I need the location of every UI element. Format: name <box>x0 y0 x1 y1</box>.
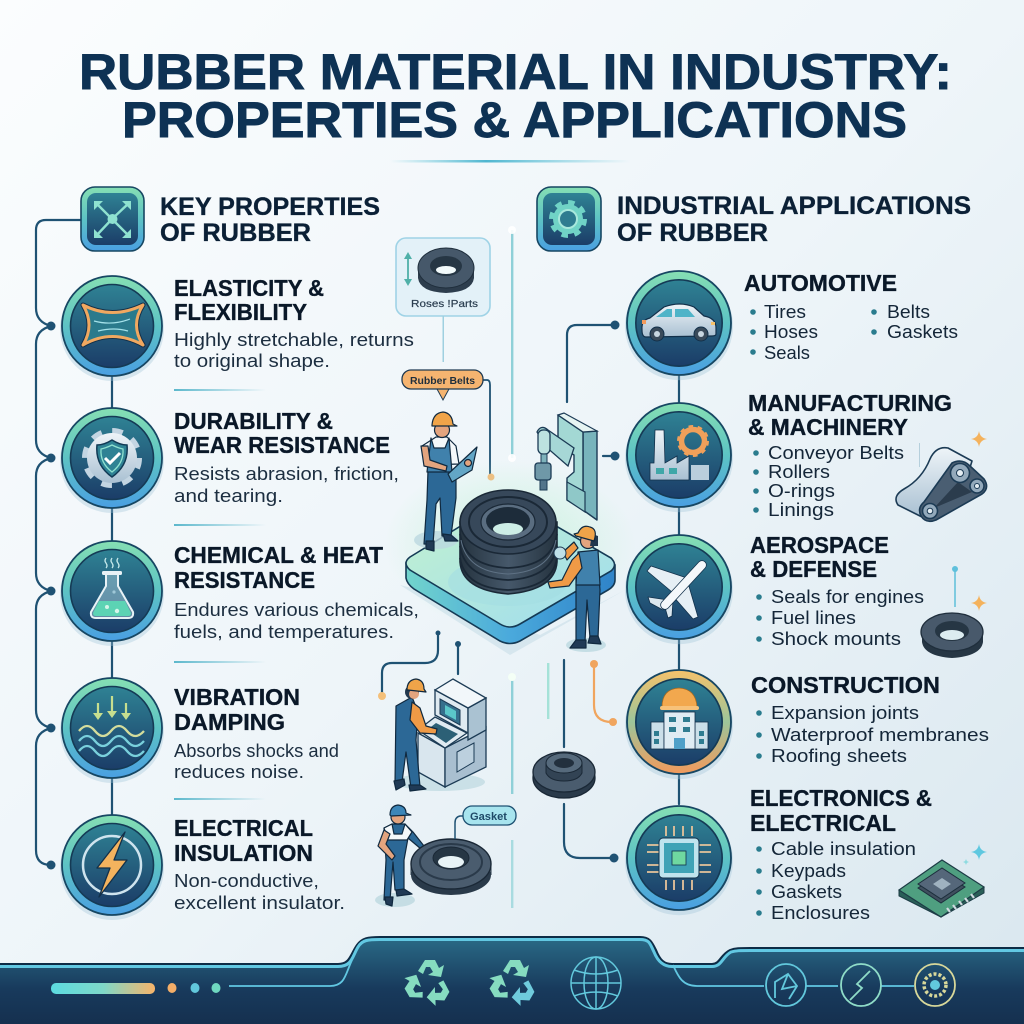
panel: aerospace and defense: & DEFENSE <box>750 556 877 582</box>
icon: circuit chip <box>899 844 987 917</box>
panel: automotive: Tires <box>764 301 806 322</box>
panel: construction: Roofing sheets <box>771 745 907 766</box>
heading: key properties <box>160 193 380 247</box>
panel: aerospace and defense <box>625 532 924 649</box>
left connector spine <box>36 220 112 870</box>
worker with gasket ring <box>375 805 491 907</box>
panel: chemical and heat: Endures various chemicals, <box>174 599 419 620</box>
panel: aerospace and defense: Shock mounts <box>771 628 901 649</box>
label card: roses parts: Roses !Parts <box>411 298 478 310</box>
panel: manufacturing and machinery <box>625 390 952 520</box>
heading: industrial applications: OF RUBBER <box>617 219 768 247</box>
panel: elasticity: Highly stretchable, returns <box>174 329 414 350</box>
panel: electrical insulation: excellent insulator. <box>174 892 345 913</box>
label: gasket <box>455 806 516 839</box>
panel: vibration damping: DAMPING <box>174 709 285 735</box>
machine arm <box>535 413 597 520</box>
panel: elasticity: ELASTICITY & <box>174 275 324 301</box>
panel: electronics and electrical: Cable insulation <box>771 838 916 859</box>
panel: electronics and electrical: Enclosures <box>771 902 870 923</box>
footer band <box>0 937 1024 1024</box>
panel: aerospace and defense: Seals for engines <box>771 586 924 607</box>
panel: electrical insulation: Non-conductive, <box>174 870 319 891</box>
right connectors <box>378 226 679 908</box>
icon: footer machine <box>766 964 806 1006</box>
worker with clipboard <box>414 412 477 551</box>
panel: construction: CONSTRUCTION <box>751 672 940 698</box>
panel: elasticity: FLEXIBILITY <box>174 299 307 325</box>
label: rubber belts: Rubber Belts <box>410 375 475 387</box>
panel: durability: and tearing. <box>174 485 283 506</box>
panel: chemical and heat: fuels, and temperatures. <box>174 621 394 642</box>
panel: automotive: Seals <box>764 342 810 363</box>
panel: automotive: Gaskets <box>887 321 958 342</box>
label: rubber belts <box>402 370 494 480</box>
panel: durability: Resists abrasion, friction, <box>174 463 399 484</box>
icon: recycle one <box>400 960 453 1008</box>
panel: vibration damping: reduces noise. <box>174 761 304 782</box>
worker in orange sleeves <box>548 526 606 652</box>
panel: chemical and heat <box>60 541 419 646</box>
icon: footer bolt <box>841 964 881 1006</box>
panel: automotive: AUTOMOTIVE <box>744 270 897 296</box>
panel: durability: DURABILITY & <box>174 408 333 434</box>
heading: industrial applications <box>617 192 971 247</box>
title <box>79 44 952 148</box>
panel: construction: Expansion joints <box>771 702 919 723</box>
label card: roses parts <box>396 238 490 316</box>
machine operator at console <box>394 679 486 791</box>
icon: footer gear <box>915 964 955 1006</box>
icon: key properties header <box>81 187 144 251</box>
heading: key properties: OF RUBBER <box>160 219 311 247</box>
panel: durability <box>60 408 399 513</box>
panel: manufacturing and machinery: Conveyor Belts <box>768 442 904 463</box>
panel: aerospace and defense: Fuel lines <box>771 607 856 628</box>
panel: vibration damping <box>60 678 339 783</box>
panel: electrical insulation: ELECTRICAL <box>174 815 313 841</box>
icon: applications header <box>537 187 601 251</box>
panel: vibration damping: VIBRATION <box>174 684 300 710</box>
panel: electronics and electrical: Keypads <box>771 860 846 881</box>
icon: rubber ring <box>921 566 987 658</box>
panel: automotive: Belts <box>887 301 930 322</box>
panel: vibration damping: Absorbs shocks and <box>174 740 339 761</box>
panel: electronics and electrical: ELECTRICAL <box>750 810 896 836</box>
panel: electronics and electrical <box>625 785 932 923</box>
panel: aerospace and defense: AEROSPACE <box>750 532 889 558</box>
panel: construction: Waterproof membranes <box>771 724 989 745</box>
panel: electrical insulation: INSULATION <box>174 840 313 866</box>
label: gasket: Gasket <box>470 811 507 823</box>
panel: durability: WEAR RESISTANCE <box>174 432 390 458</box>
icon: conveyor belt <box>896 431 987 521</box>
title: PROPERTIES & APPLICATIONS <box>122 92 907 148</box>
title: RUBBER MATERIAL IN INDUSTRY: <box>79 44 952 100</box>
panel: elasticity: to original shape. <box>174 350 330 371</box>
panel: chemical and heat: CHEMICAL & HEAT <box>174 542 383 568</box>
platform <box>385 460 635 655</box>
icon: recycle two <box>485 960 538 1008</box>
panel: electronics and electrical: ELECTRONICS & <box>750 785 932 811</box>
panel: construction <box>625 670 989 779</box>
small rubber bushing <box>533 752 595 798</box>
panel: chemical and heat: RESISTANCE <box>174 567 315 593</box>
heading: key properties: KEY PROPERTIES <box>160 193 380 221</box>
icon: globe <box>571 957 621 1009</box>
panel: automotive: Hoses <box>764 321 818 342</box>
panel: manufacturing and machinery: Rollers <box>768 461 830 482</box>
panel: manufacturing and machinery: O-rings <box>768 480 835 501</box>
panel: manufacturing and machinery: Linings <box>768 499 834 520</box>
rubber tire stack <box>448 490 568 606</box>
panel: elasticity <box>60 275 414 381</box>
heading: industrial applications: INDUSTRIAL APPLICATIONS <box>617 192 971 220</box>
panel: manufacturing and machinery: & MACHINERY <box>748 414 908 440</box>
panel: automotive <box>625 270 958 380</box>
panel: electrical insulation <box>60 815 345 920</box>
panel: manufacturing and machinery: MANUFACTURING <box>748 390 952 416</box>
panel: electronics and electrical: Gaskets <box>771 881 842 902</box>
